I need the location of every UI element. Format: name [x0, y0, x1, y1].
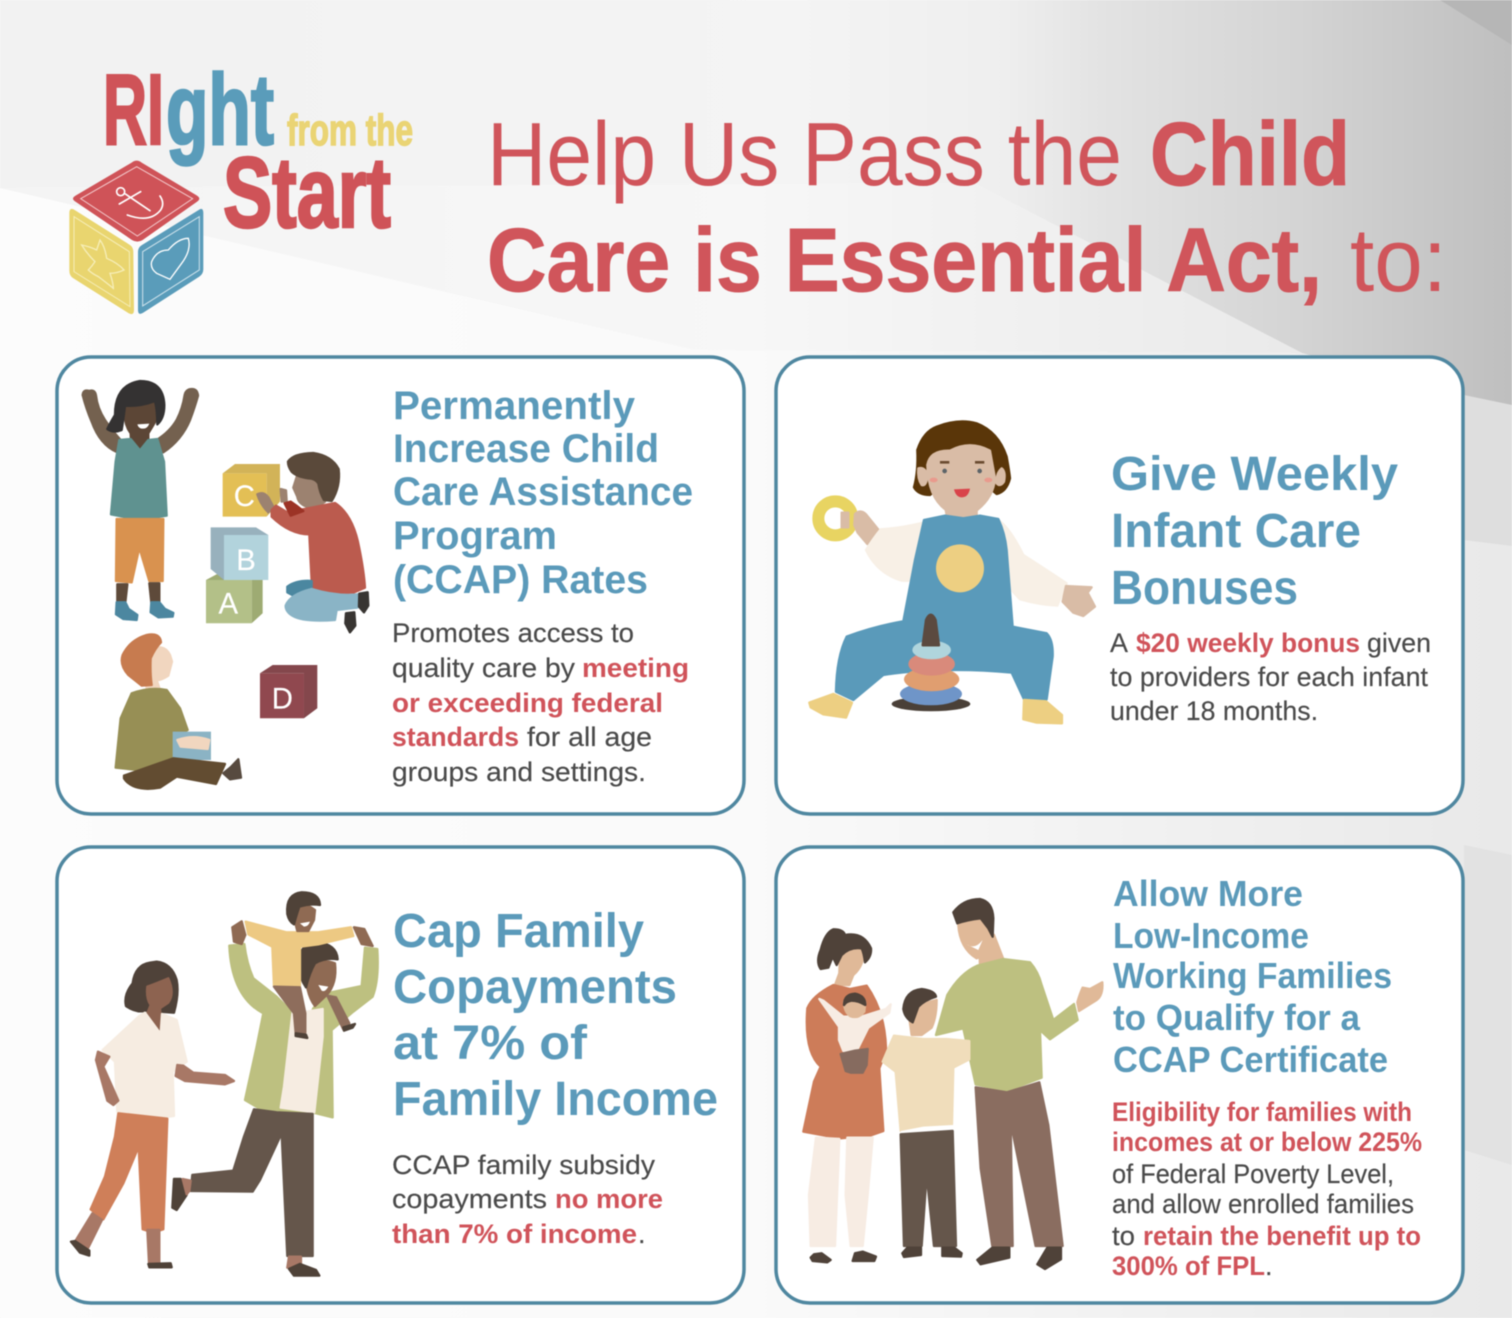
logo wordmark: from the [287, 106, 413, 155]
body text: incomes at or below 225% [1112, 1127, 1422, 1157]
heading [393, 384, 693, 602]
illustration: children playing with blocks: D [272, 682, 293, 715]
heading: Give Weekly [1111, 448, 1398, 501]
panel: Allow More Low-Income Working Families [776, 847, 1463, 1303]
heading: Program [393, 514, 557, 558]
body text: than 7% of income [392, 1219, 637, 1249]
heading: Cap Family [393, 905, 644, 958]
body text: retain the benefit up to [1143, 1221, 1421, 1251]
title: to: [1350, 211, 1447, 311]
heading: to Qualify for a [1113, 997, 1361, 1038]
body text [392, 618, 689, 787]
body text: no more [555, 1184, 663, 1214]
heading: Copayments [393, 961, 677, 1014]
body text: . [638, 1219, 646, 1249]
body text: 300% of FPL [1112, 1251, 1265, 1281]
heading [1113, 873, 1392, 1080]
block C [223, 464, 280, 517]
body text: to [1112, 1221, 1135, 1251]
body text: A [1110, 628, 1128, 658]
body text [392, 1150, 663, 1249]
body text: under 18 months. [1110, 696, 1318, 726]
title: Care is Essential Act, [487, 211, 1322, 311]
body text: Eligibility for families with [1112, 1097, 1412, 1127]
illustration: children playing with blocks: A [219, 587, 239, 620]
heading: at 7% of [393, 1017, 588, 1070]
title: Help Us Pass the [487, 105, 1122, 205]
body text: to providers for each infant [1110, 662, 1428, 692]
heading: Permanently [393, 384, 636, 428]
illustration: family of four [803, 899, 1102, 1269]
body text: $20 weekly bonus [1136, 628, 1360, 658]
boy in red [293, 475, 325, 507]
heading: Bonuses [1111, 562, 1298, 615]
heading: Family Income [393, 1073, 718, 1126]
body text: quality care by [392, 653, 576, 683]
child [232, 921, 373, 946]
seated boy [145, 647, 172, 690]
heading: Working Families [1113, 955, 1392, 996]
panel: Cap Family Copayments [57, 847, 744, 1303]
body text: Promotes access to [392, 618, 634, 648]
mother [835, 945, 864, 985]
panel: Give Weekly Infant Care Bonuses [776, 357, 1463, 814]
heading [393, 905, 718, 1126]
illustration: children playing with blocks: B [236, 544, 256, 577]
baby [819, 999, 891, 1051]
icon: toy block cube [69, 161, 203, 314]
body text: CCAP family subsidy [392, 1150, 656, 1180]
illustration: children playing with blocks [83, 381, 368, 789]
body text: copayments [392, 1184, 547, 1214]
man [229, 944, 378, 1117]
body text: or exceeding federal [392, 688, 663, 718]
heading: Increase Child [393, 427, 659, 471]
illustration: baby with stacking toy [809, 421, 1095, 723]
heading: Allow More [1113, 873, 1303, 914]
block D [260, 665, 317, 718]
logo wordmark: ght [166, 54, 274, 166]
logo wordmark [103, 54, 413, 249]
logo: Right from the Start [69, 54, 413, 314]
heading: Infant Care [1111, 505, 1361, 558]
body text: and allow enrolled families [1112, 1189, 1414, 1219]
man [979, 935, 1003, 967]
heading: CCAP Certificate [1113, 1039, 1388, 1080]
heading: (CCAP) Rates [393, 558, 648, 602]
heading: Low-Income [1113, 915, 1309, 956]
boy [909, 1000, 937, 1035]
body text: meeting [582, 653, 689, 683]
logo wordmark: Start [223, 137, 391, 249]
panel: Permanently Increase CCAP Rates [57, 357, 744, 814]
block A [206, 574, 263, 623]
illustration: family running with child on shoulders [71, 892, 378, 1276]
illustration: children playing with blocks: C [234, 480, 255, 513]
logo wordmark: RI [103, 54, 164, 166]
heading: Care Assistance [393, 470, 693, 514]
body text [1110, 628, 1431, 726]
woman [125, 962, 178, 1013]
body text: groups and settings. [392, 757, 646, 787]
block B [211, 527, 268, 580]
heading [1111, 448, 1398, 615]
body text [1112, 1097, 1422, 1281]
body text: of Federal Poverty Level, [1112, 1159, 1394, 1189]
body text: . [1265, 1251, 1273, 1281]
body text: standards [392, 722, 519, 752]
title [487, 105, 1447, 311]
title: Child [1150, 105, 1350, 205]
body text: given [1367, 628, 1431, 658]
body text: for all age [527, 722, 652, 752]
